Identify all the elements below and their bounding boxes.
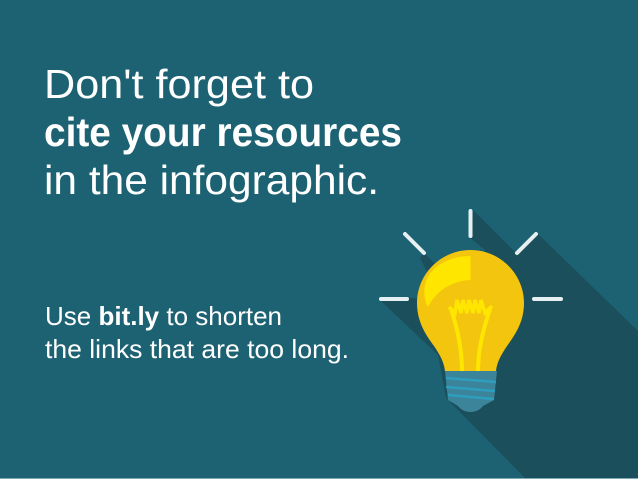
tip text: the links that are too long. bbox=[45, 334, 349, 364]
bulb glass bbox=[417, 250, 524, 371]
icon: light bulb bbox=[381, 211, 561, 412]
heading bbox=[44, 61, 402, 203]
heading: cite your resources bbox=[44, 109, 402, 155]
heading: in the infographic. bbox=[44, 157, 379, 203]
light rays bbox=[381, 211, 561, 299]
tip text bbox=[45, 301, 349, 364]
screw threads bbox=[446, 378, 496, 399]
filament bbox=[449, 300, 492, 371]
glass highlight bbox=[424, 256, 470, 307]
bottom edge line bbox=[0, 478, 638, 479]
screw base bbox=[445, 371, 497, 412]
heading: Don't forget to bbox=[44, 61, 314, 107]
long shadow of the light bulb bbox=[381, 210, 638, 478]
tip text: Use bit.ly to shorten bbox=[45, 301, 282, 331]
